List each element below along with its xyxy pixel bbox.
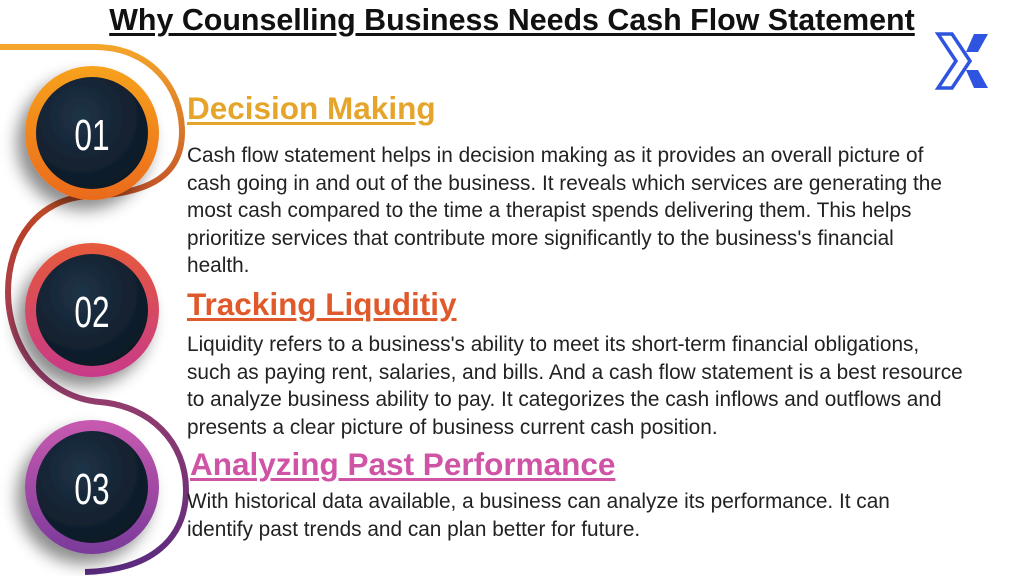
circle 02: 02: [74, 288, 110, 337]
text: decision making: health.: [187, 254, 249, 277]
text: tracking liquidity: to analyze business ability to pay. It categorizes the cash inflows and outflows and: [187, 388, 942, 411]
heading: tracking liquidity: Tracking Liquditiy: [187, 286, 457, 322]
circle 03: 03: [74, 465, 110, 514]
circle 01: 01: [74, 111, 110, 160]
text: tracking liquidity: presents a clear picture of business current cash position.: [187, 416, 718, 439]
title: Why Counselling Business Needs Cash Flow Statement: [109, 3, 915, 37]
text: decision making: cash going in and out of the business. It reveals which services are generating the: [187, 172, 942, 195]
heading: decision making: Decision Making: [187, 90, 436, 126]
text: tracking liquidity: Liquidity refers to a business's ability to meet its short-term financial obligations,: [187, 333, 919, 356]
text: decision making: [187, 144, 942, 277]
text: decision making: Cash flow statement helps in decision making as it provides an overall picture of: [187, 144, 923, 167]
logo icon: [934, 32, 988, 90]
circle 02: [25, 243, 159, 377]
text: decision making: most cash compared to the time a therapist spends delivering them. This helps: [187, 199, 911, 222]
heading: analyzing past performance: Analyzing Past Performance: [190, 446, 615, 482]
decorative swoosh and numbered circles: [0, 44, 189, 575]
text: analyzing past performance: [187, 490, 890, 541]
circle 01: [25, 66, 159, 200]
text: analyzing past performance: With historical data available, a business can analyze its performance. It can: [187, 490, 890, 513]
text: tracking liquidity: such as paying rent, salaries, and bills. And a cash flow statement is a best resource: [187, 361, 963, 384]
text: analyzing past performance: identify past trends and can plan better for future.: [187, 518, 640, 541]
circle 03: [25, 420, 159, 554]
text: decision making: prioritize services that contribute more significantly to the business's financial: [187, 227, 894, 250]
text: tracking liquidity: [187, 333, 963, 439]
